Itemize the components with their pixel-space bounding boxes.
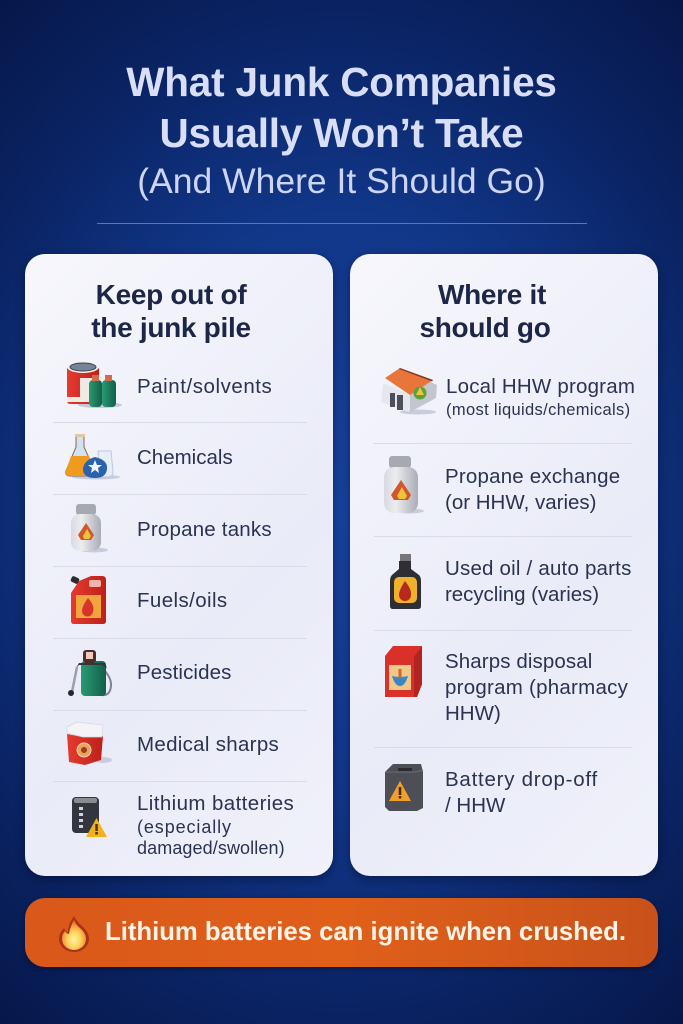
title: Usually Won’t Take	[160, 110, 524, 156]
label: used oil / auto parts: recycling (varies)	[445, 583, 599, 606]
heading: where it should go	[419, 279, 551, 343]
panel: keep out of the junk pile	[25, 254, 333, 876]
label: especially damaged/swollen	[137, 817, 285, 858]
panel: where it should go	[350, 254, 658, 876]
label: battery drop-off: Battery drop-off	[445, 768, 598, 791]
banner: lithium warning	[25, 898, 658, 967]
icon: propane tank	[71, 504, 108, 552]
label: most liquids/chemicals: (most liquids/chemicals)	[446, 401, 630, 419]
label: paint/solvents: Paint/solvents	[137, 375, 272, 398]
icon: pesticide sprayer	[68, 650, 112, 696]
icon: paint can and cylinders	[67, 361, 122, 408]
title: What Junk Companies	[126, 59, 557, 105]
subtitle: (And Where It Should Go)	[137, 161, 546, 201]
label: medical sharps: Medical sharps	[137, 733, 279, 756]
label: pesticides: Pesticides	[137, 661, 231, 684]
icon: fuel can	[70, 576, 106, 624]
banner text: Lithium batteries can ignite when crushed.	[105, 918, 626, 946]
icon: flame	[59, 916, 89, 952]
icon: lithium battery with warning	[72, 797, 107, 837]
label: propane exchange: (or HHW, varies)	[445, 491, 596, 514]
label: battery drop-off: / HHW	[445, 794, 505, 817]
label: especially damaged/swollen: damaged/swollen)	[137, 838, 285, 858]
heading: where it should go: Where it	[438, 279, 546, 310]
label: sharps disposal: HHW)	[445, 702, 501, 725]
label: propane exchange: Propane exchange	[445, 465, 620, 488]
heading: keep out	[91, 279, 251, 343]
heading: keep out: Keep out of	[96, 279, 246, 310]
icon: flask and beaker	[65, 434, 120, 480]
icon: house	[381, 368, 437, 414]
icon: sharps container	[66, 722, 112, 765]
icon: sharps drop box	[385, 646, 422, 697]
label: used oil / auto parts	[445, 557, 632, 606]
label: sharps disposal: program (pharmacy	[445, 676, 628, 699]
heading: keep out: the junk pile	[91, 312, 251, 343]
heading: where it should go: should go	[419, 312, 551, 343]
label: fuels/oils: Fuels/oils	[137, 589, 228, 612]
title	[126, 59, 557, 156]
icon: oil bottle	[390, 554, 421, 609]
icon: propane tank	[384, 456, 424, 514]
label: sharps disposal: Sharps disposal	[445, 650, 592, 673]
label: sharps disposal	[445, 650, 628, 725]
label: used oil / auto parts: Used oil / auto parts	[445, 557, 632, 580]
label: especially damaged/swollen: (especially	[137, 817, 232, 837]
label: propane exchange	[445, 465, 620, 514]
label: propane tanks: Propane tanks	[137, 518, 272, 541]
label: local hhw program: Local HHW program	[446, 375, 635, 398]
label: lithium batteries: Lithium batteries	[137, 792, 294, 815]
label: battery drop-off	[445, 768, 598, 817]
icon: battery box	[385, 764, 424, 811]
label: chemicals: Chemicals	[137, 446, 233, 469]
